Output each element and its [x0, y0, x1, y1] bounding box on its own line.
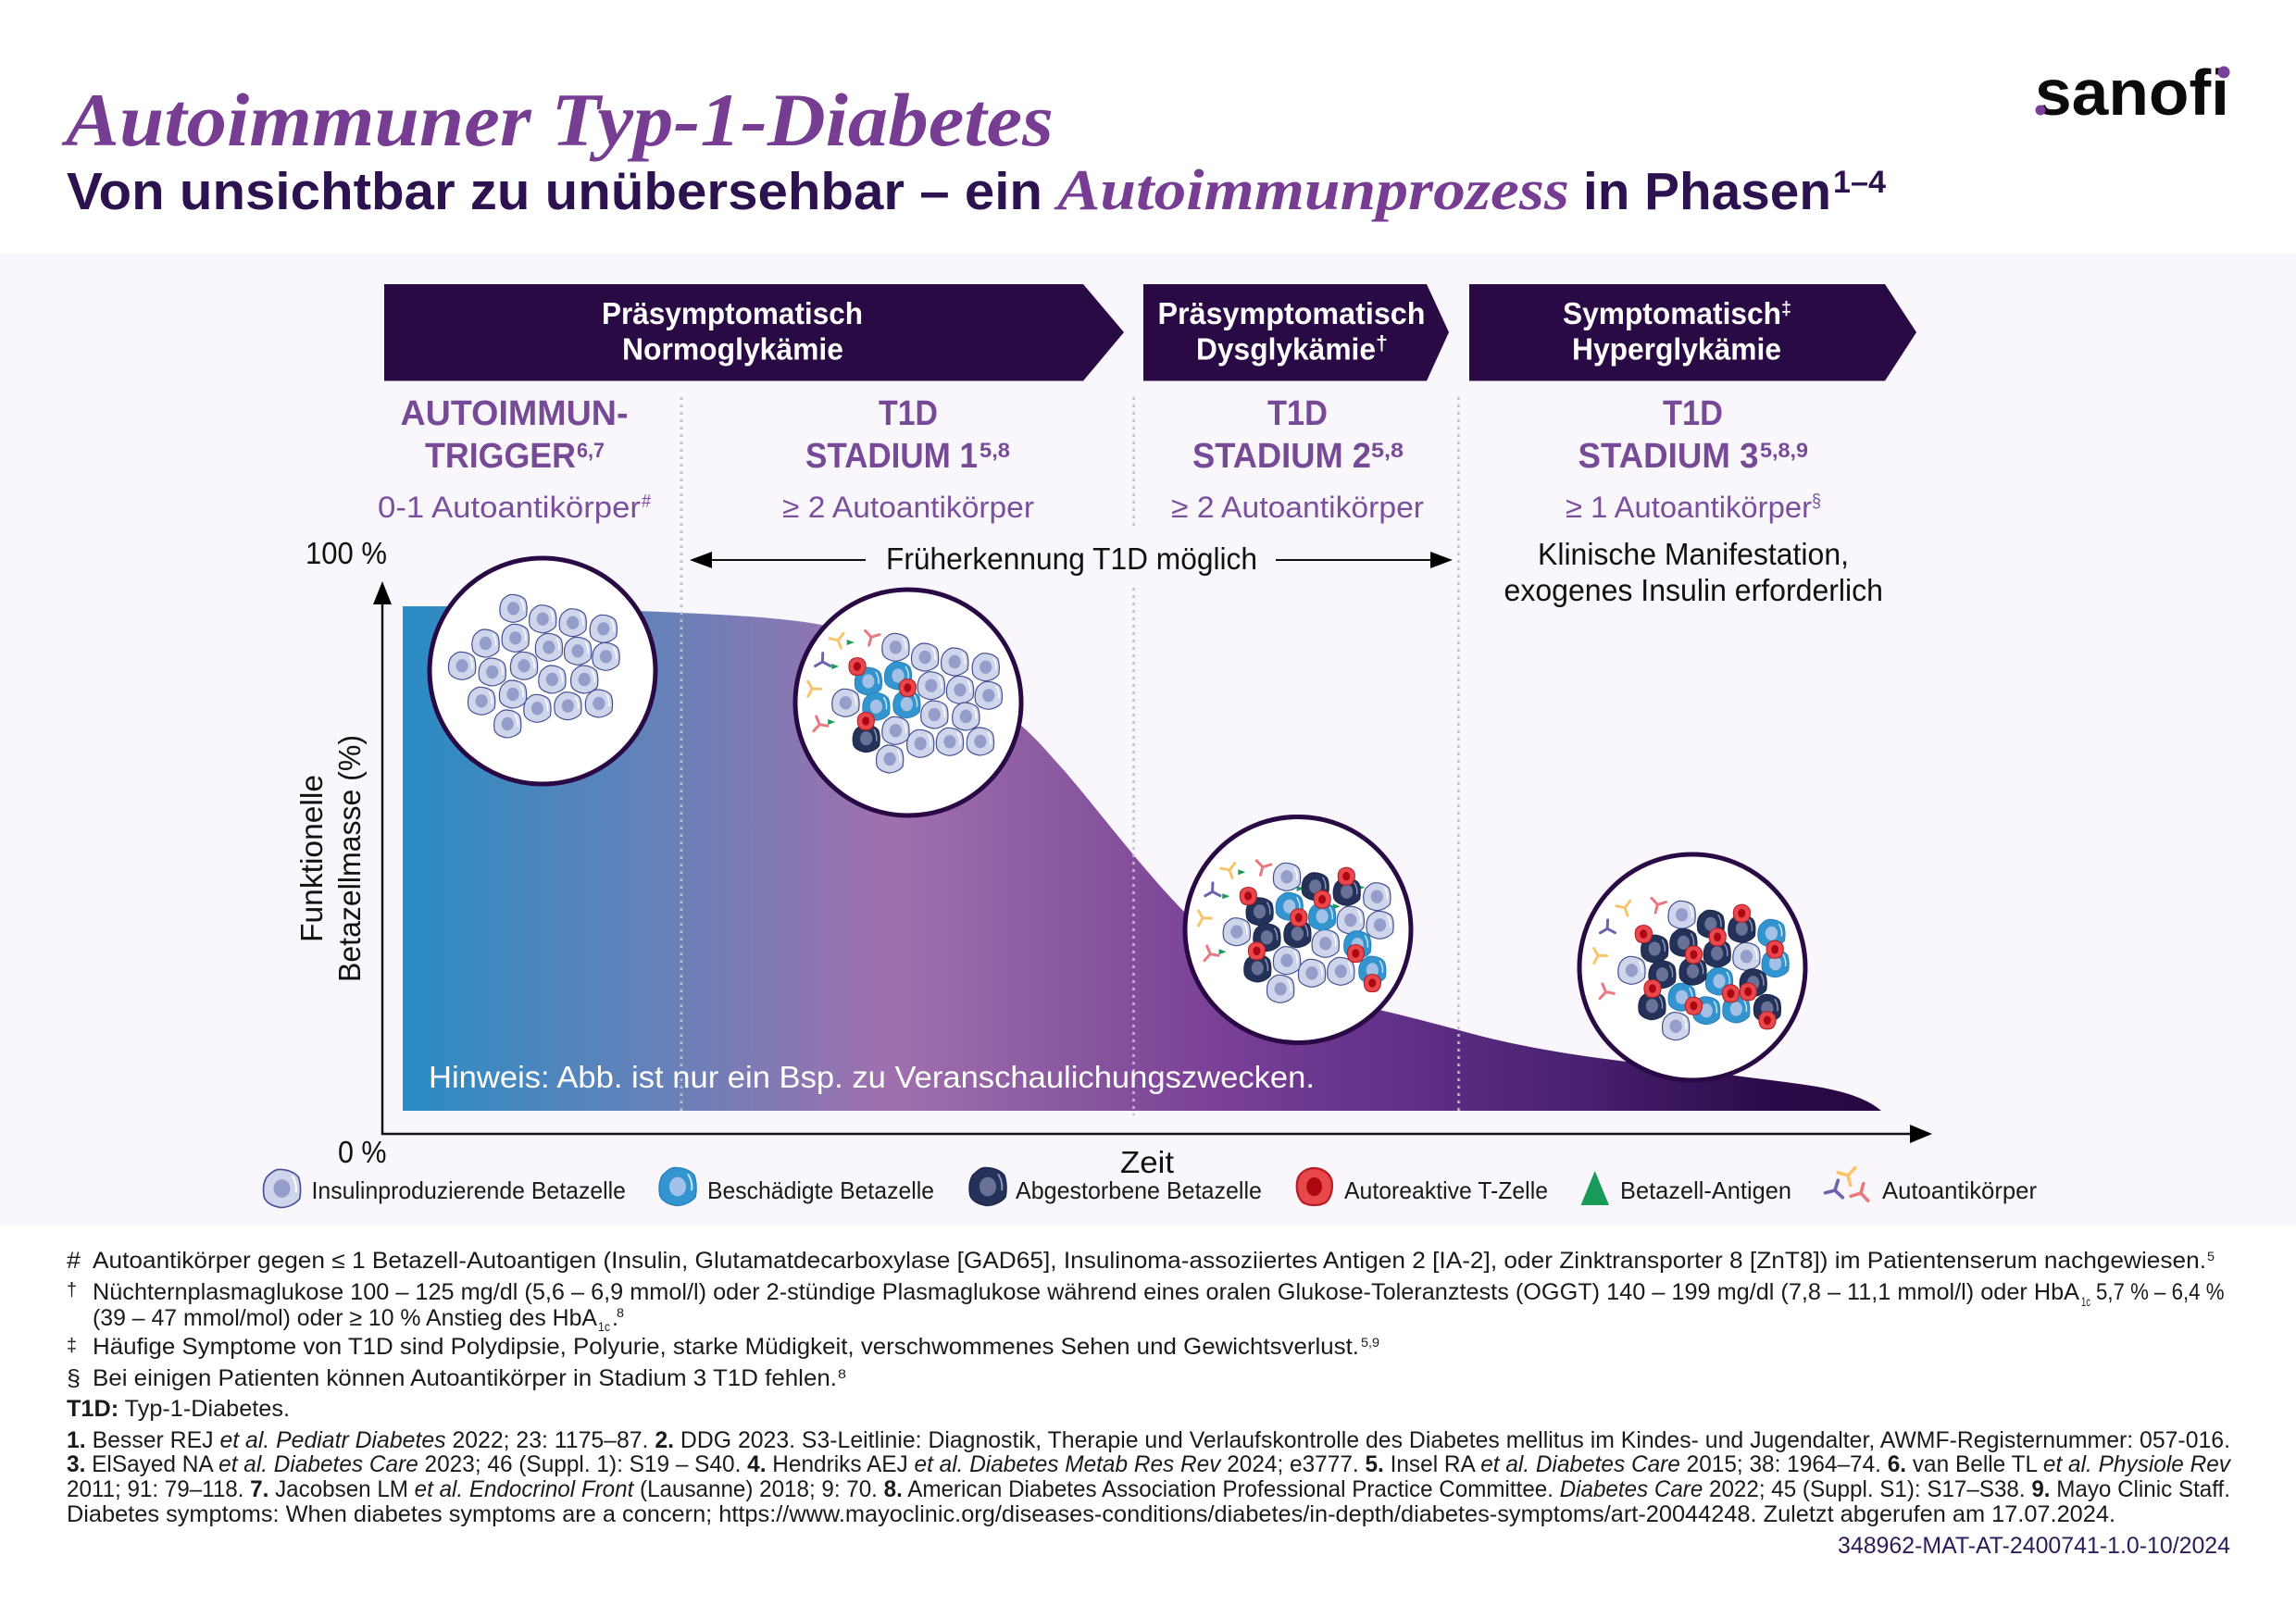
- stage heading: T1D Stadium 3: STADIUM 3: [1578, 437, 1759, 476]
- footnote: ‡: 5,9: [1361, 1335, 1379, 1350]
- footnote: †: [67, 1279, 2224, 1334]
- footnote: †: .: [612, 1305, 618, 1331]
- panel: chart background: [0, 254, 2296, 1226]
- area chart: beta cell mass curve: [403, 606, 1881, 1111]
- legend item: Abgestorbene Betazelle: [969, 1167, 1262, 1206]
- stage heading: T1D Stadium 2: T1D: [1267, 394, 1328, 433]
- banner: Präsymptomatisch Dysglykämie: Präsymptomatisch: [1157, 296, 1426, 330]
- footnote: #: #: [67, 1248, 81, 1274]
- axis label: Funktionelle Betazellmasse: Betazellmasse (%): [332, 735, 367, 982]
- footnotes: [67, 1248, 2231, 1559]
- legend item: Betazell-Antigen: [1581, 1171, 1791, 1205]
- axes: [373, 581, 1932, 1143]
- legend item: Beschädigte Betazelle: [659, 1167, 934, 1206]
- banner: Präsymptomatisch Normoglykämie: [384, 284, 1124, 381]
- stage heading: T1D Stadium 1: T1D: [879, 394, 938, 433]
- legend item: Autoantikörper: [1823, 1168, 2037, 1204]
- axis label: 100 %: 100 %: [306, 536, 387, 570]
- banner: Präsymptomatisch Dysglykämie: †: [1376, 331, 1388, 355]
- bubble: stage 2 cells: [1185, 816, 1411, 1042]
- stage heading: T1D Stadium 2: [1171, 394, 1424, 524]
- banner: Symptomatisch Hyperglykämie: ‡: [1781, 299, 1791, 319]
- references: 1. Besser REJ et al. Pediatr Diabetes 2022; 23: 1175–87. 2. DDG 2023. S3-Leitlinie: Diagnostik, Therapie und Verlaufskontrolle des Diabetes mellitus im Kindes- und Jugendalter, AWMF-Registernummer: 057-016.: [67, 1427, 2230, 1453]
- banner: Präsymptomatisch Normoglykämie: Präsymptomatisch: [602, 296, 863, 330]
- footnote: †: 1c: [598, 1319, 610, 1334]
- banner: Symptomatisch Hyperglykämie: [1469, 284, 1916, 381]
- arrow: Früherkennung T1D möglich: [690, 541, 1453, 576]
- legend item: Autoantikörper: Autoantikörper: [1882, 1176, 2037, 1204]
- abbreviation: T1D: T1D: Typ-1-Diabetes.: [67, 1396, 290, 1422]
- footnote: #: Autoantikörper gegen ≤ 1 Betazell-Autoantigen (Insulin, Glutamatdecarboxylase [GAD65], Insulinoma-assoziiertes Antigen 2 [IA-2], oder Zinktransporter 8 [ZnT8]) im Patientenserum nachgewiesen.: [93, 1248, 2206, 1274]
- logo: sanofi: sanofi: [2035, 56, 2229, 129]
- stage heading: T1D Stadium 1: [782, 394, 1034, 524]
- legend item: Insulinproduzierende Betazelle: Insulinproduzierende Betazelle: [311, 1176, 626, 1204]
- axis label: Zeit: Zeit: [1120, 1145, 1174, 1179]
- stage heading: Autoimmun-Trigger: AUTOIMMUN-: [400, 394, 628, 433]
- footnote: #: 5: [2207, 1249, 2215, 1263]
- footnote: †: 1c: [2081, 1294, 2090, 1309]
- footnote: †: 5,7 % – 6,4 %: [2096, 1279, 2224, 1305]
- footnote: §: 8: [838, 1366, 846, 1381]
- stage heading: T1D Stadium 3: §: [1812, 492, 1821, 512]
- subtitle: Von unsichtbar zu unübersehbar – ein: [67, 162, 1042, 221]
- bubble: healthy beta cells: [430, 558, 655, 784]
- bubble: stage 3 cells: [1579, 854, 1805, 1080]
- stage heading: T1D Stadium 1: 5,8: [980, 439, 1010, 462]
- axis label: Funktionelle Betazellmasse: Funktionelle: [294, 775, 329, 942]
- stage heading: T1D Stadium 3: ≥ 1 Autoantikörper: [1566, 491, 1812, 524]
- bubble: stage 1 cells: [795, 590, 1021, 815]
- references: Diabetes symptoms: When diabetes symptoms are a concern; https://www.mayoclinic.org/diseases-conditions/diabetes/in-depth/diabetes-symptoms/art-20044248. Zuletzt abgerufen am 17.07.2024.: [67, 1501, 2115, 1527]
- legend item: Beschädigte Betazelle: Beschädigte Betazelle: [707, 1176, 934, 1204]
- stage heading: T1D Stadium 2: STADIUM 2: [1192, 437, 1371, 476]
- stage heading: T1D Stadium 3: T1D: [1663, 394, 1723, 433]
- axis label: 0 %: 0 %: [338, 1135, 387, 1169]
- banner: Symptomatisch Hyperglykämie: Symptomatisch: [1563, 296, 1781, 330]
- banner: Präsymptomatisch Dysglykämie: [1143, 284, 1449, 381]
- document code: 348962-MAT-AT-2400741-1.0-10/2024: [1838, 1533, 2230, 1559]
- stage heading: Autoimmun-Trigger: TRIGGER: [425, 437, 576, 476]
- legend item: Autoreaktive T-Zelle: [1297, 1168, 1548, 1205]
- footnote: †: 8: [617, 1305, 624, 1320]
- references: [67, 1427, 2231, 1527]
- stage heading: T1D Stadium 3: [1566, 394, 1821, 524]
- banner: Präsymptomatisch Dysglykämie: Dysglykämie: [1196, 331, 1376, 367]
- stage heading: T1D Stadium 2: ≥ 2 Autoantikörper: [1171, 491, 1424, 524]
- subtitle: 1–4: [1833, 165, 1886, 200]
- footnote: ‡: ‡: [67, 1336, 77, 1356]
- footnote: †: Nüchternplasmaglukose 100 – 125 mg/dl (5,6 – 6,9 mmol/l) oder 2-stündige Plasmaglukose während eines oralen Glukose-Toleranztests (OGGT) 140 – 199 mg/dl (7,8 – 11,1 mmol/l) oder HbA: [93, 1279, 2079, 1305]
- banner: Präsymptomatisch Normoglykämie: Normoglykämie: [622, 331, 843, 367]
- legend item: Betazell-Antigen: Betazell-Antigen: [1620, 1176, 1791, 1204]
- axis label: Funktionelle Betazellmasse: [294, 735, 367, 982]
- footnote: †: (39 – 47 mmol/mol) oder ≥ 10 % Anstieg des HbA: [93, 1305, 597, 1331]
- footnote: §: Bei einigen Patienten können Autoantikörper in Stadium 3 T1D fehlen.: [93, 1365, 837, 1391]
- stage heading: Autoimmun-Trigger: #: [642, 492, 652, 512]
- footnote: †: †: [67, 1280, 77, 1301]
- references: 3. ElSayed NA et al. Diabetes Care 2023; 46 (Suppl. 1): S19 – S40. 4. Hendriks AEJ et al. Diabetes Metab Res Rev 2024; e3777. 5. Insel RA et al. Diabetes Care 2015; 38: 1964–74. 6. van Belle TL et al. Physiole Rev: [67, 1451, 2231, 1477]
- stage heading: T1D Stadium 1: ≥ 2 Autoantikörper: [782, 491, 1034, 524]
- legend item: Abgestorbene Betazelle: Abgestorbene Betazelle: [1016, 1176, 1262, 1204]
- text: Klinische Manifestation: exogenes Insulin erforderlich: [1504, 573, 1883, 607]
- text: Klinische Manifestation: Klinische Manifestation,: [1538, 537, 1849, 571]
- title: Autoimmuner Typ-1-Diabetes: [61, 78, 1054, 162]
- footnote: §: §: [67, 1365, 81, 1391]
- arrow: Früherkennung T1D möglich: Früherkennung T1D möglich: [886, 541, 1257, 576]
- note: Hinweis: Hinweis: Abb. ist nur ein Bsp. zu Veranschaulichungszwecken.: [429, 1060, 1315, 1094]
- footnote: ‡: Häufige Symptome von T1D sind Polydipsie, Polyurie, starke Müdigkeit, verschwommenes Sehen und Gewichtsverlust.: [93, 1334, 1359, 1360]
- legend item: Insulinproduzierende Betazelle: [264, 1169, 626, 1208]
- text: Klinische Manifestation: [1504, 537, 1883, 607]
- stage heading: Autoimmun-Trigger: 0-1 Autoantikörper: [378, 491, 641, 524]
- subtitle: in Phasen: [1583, 162, 1831, 221]
- subtitle: Autoimmunprozess: [1054, 159, 1569, 222]
- stage heading: T1D Stadium 2: 5,8: [1371, 439, 1404, 462]
- stage heading: Autoimmun-Trigger: [378, 394, 652, 524]
- legend: [264, 1167, 2037, 1208]
- stage heading: Autoimmun-Trigger: 6,7: [577, 439, 605, 462]
- legend item: Autoreaktive T-Zelle: Autoreaktive T-Zelle: [1344, 1176, 1548, 1204]
- references: 2011; 91: 79–118. 7. Jacobsen LM et al. Endocrinol Front (Lausanne) 2018; 9: 70. 8. American Diabetes Association Professional Practice Committee. Diabetes Care 2022; 45 (Suppl. S1): S17–S38. 9. Mayo Clinic Staff.: [67, 1476, 2230, 1502]
- subtitle: [67, 159, 1886, 222]
- stage heading: T1D Stadium 3: 5,8,9: [1760, 439, 1808, 462]
- banner: Symptomatisch Hyperglykämie: Hyperglykämie: [1572, 331, 1781, 367]
- stage heading: T1D Stadium 1: STADIUM 1: [805, 437, 978, 476]
